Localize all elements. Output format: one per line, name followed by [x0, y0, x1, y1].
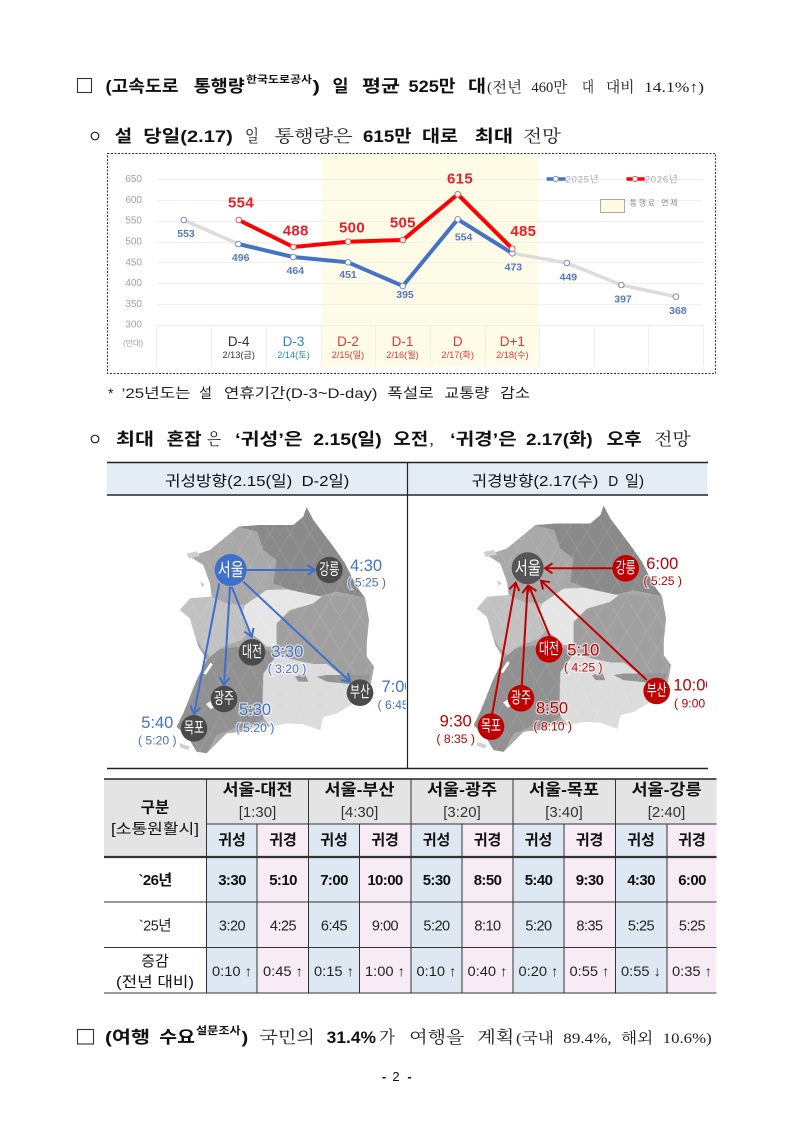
- subheading: peak congestion: 오전: [393, 430, 428, 449]
- row: 2025: [219, 918, 706, 934]
- city labels: outbound: [184, 560, 370, 737]
- travel times: outbound: ( 5:20 ): [236, 721, 274, 735]
- series: 2025 grey extensions: [184, 220, 676, 297]
- subheading: peak congestion: 은: [207, 430, 221, 449]
- heading: return direction: 귀경방향(2.17(수): [472, 473, 598, 490]
- row: 2026: 10:00: [367, 872, 403, 889]
- arrows: outbound: [194, 570, 350, 714]
- row: change vs previous year: 0:20 ↑: [518, 963, 558, 979]
- travel times: outbound: ( 5:20 ): [138, 734, 177, 748]
- day labels: 2/14(토): [277, 350, 310, 360]
- route headers: 서울-광주: [427, 781, 497, 799]
- title: highway traffic headline: 일: [332, 77, 348, 96]
- row: 2026: 6:00: [678, 872, 706, 889]
- direction headers: 귀성: [525, 832, 552, 849]
- title: highway traffic headline: 통행량: [194, 77, 245, 96]
- city labels: outbound: 목포: [184, 720, 204, 737]
- subheading: peak congestion: 혼잡: [167, 430, 202, 449]
- row: change vs previous year: 0:55 ↓: [621, 963, 661, 979]
- page number: 2: [392, 1069, 400, 1084]
- city labels: outbound: 대전: [242, 643, 262, 661]
- travel times: outbound: 3:30: [271, 643, 303, 661]
- city labels: return: 대전: [539, 640, 559, 658]
- direction headers: 귀경: [371, 832, 399, 849]
- subheading: peak congestion: 2.17(화): [526, 430, 593, 449]
- travel times: return: ( 4:25 ): [564, 660, 603, 674]
- travel times: return: ( 8:35 ): [436, 732, 475, 746]
- route headers: [3:40]: [545, 804, 583, 821]
- city nodes: return: [478, 552, 670, 740]
- day labels: 2/13(금): [222, 350, 255, 360]
- closing statement: travel demand: 10.6%): [663, 1031, 712, 1047]
- title: highway traffic headline: 14.1%↑): [644, 80, 704, 96]
- footnote: 연휴기간(D-3~D-day): [224, 385, 378, 401]
- city labels: return: [481, 558, 667, 735]
- title: highway traffic headline: (전년: [487, 78, 522, 96]
- row: 2025: 8:35: [576, 918, 603, 934]
- panel: route map table: [107, 462, 715, 768]
- series: 2025 line: [238, 219, 512, 286]
- travel times: return: ( 5:25 ): [643, 574, 682, 588]
- heading: return direction: D: [608, 473, 618, 490]
- row: 2026: 5:10: [269, 872, 297, 889]
- data labels 2026: 500: [339, 220, 365, 236]
- y axis labels: (만대): [123, 339, 143, 348]
- footnote: ’25년도는: [122, 385, 191, 401]
- data labels 2025: 397: [614, 293, 632, 305]
- data labels 2025: 449: [560, 272, 577, 284]
- direction headers: 귀경: [269, 832, 297, 849]
- city nodes: outbound: [181, 554, 373, 742]
- chart legend: [547, 174, 678, 212]
- city labels: outbound: 부산: [350, 683, 370, 701]
- direction headers: 귀경: [474, 832, 501, 849]
- data labels 2026: 488: [283, 222, 309, 240]
- closing statement: travel demand: 수요: [159, 1028, 195, 1047]
- row: 2025: 5:25: [628, 918, 655, 934]
- footnote: *: [108, 385, 114, 401]
- city labels: return: 강릉: [616, 559, 636, 577]
- closing statement: travel demand: 설문조사: [196, 1024, 241, 1037]
- title: highway traffic headline: 525만: [408, 77, 456, 96]
- closing statement: travel demand: 해외: [621, 1029, 653, 1047]
- city labels: return: 목포: [481, 718, 501, 735]
- row: change vs previous year: 0:40 ↑: [468, 963, 508, 979]
- city labels: return: 광주: [511, 689, 531, 707]
- row: 2026: 8:50: [474, 872, 502, 889]
- subheading: peak congestion: ‘귀성’은: [235, 430, 303, 449]
- subheading: peak congestion: 전망: [654, 429, 691, 449]
- row: 2025: 9:00: [372, 918, 399, 934]
- data labels 2025: 473: [505, 261, 522, 273]
- closing statement: travel demand: 국민의: [259, 1027, 315, 1047]
- day labels: D-3: [283, 334, 304, 349]
- y axis labels: [123, 174, 143, 348]
- direction headers: 귀경: [576, 832, 603, 849]
- day labels: D-1: [392, 334, 413, 349]
- day labels: [222, 334, 529, 360]
- title: highway traffic headline: ): [312, 77, 320, 96]
- footnote: 설: [199, 385, 212, 401]
- subheading: peak day traffic: 일: [245, 127, 259, 146]
- travel times: outbound: 5:40: [141, 714, 173, 732]
- day labels: 2/16(월): [386, 349, 419, 360]
- direction headers: 귀경: [678, 832, 706, 849]
- title: highway traffic headline: 대: [468, 77, 486, 96]
- route headers: 서울-목포: [529, 781, 599, 799]
- closing statement: travel demand: (국내: [516, 1029, 554, 1047]
- data point markers: [181, 192, 679, 300]
- row header labels: `25년: [139, 918, 171, 934]
- data labels 2025: 496: [232, 252, 250, 264]
- day labels: D-2: [337, 334, 359, 349]
- data labels 2025: 464: [287, 265, 304, 277]
- travel times: outbound: 7:00: [382, 678, 414, 696]
- subheading: peak congestion: 2.15(일): [313, 430, 382, 449]
- closing statement: travel demand: 가: [379, 1028, 396, 1047]
- data labels 2026: 505: [390, 214, 416, 232]
- chart legend: 2026년: [645, 174, 678, 186]
- closing statement: travel demand: (여행: [105, 1028, 150, 1047]
- city labels: return: 서울: [515, 558, 541, 578]
- subheading: peak congestion: 오후: [607, 430, 642, 449]
- subheading: peak day traffic: 615만: [363, 127, 412, 146]
- route headers: [222, 781, 702, 821]
- data labels 2025: [177, 228, 687, 317]
- y axis labels: 300: [125, 320, 142, 330]
- direction headers: [218, 832, 706, 849]
- route headers: [1:30]: [239, 804, 276, 821]
- arrows: return: [492, 568, 647, 717]
- travel times: return: [436, 555, 715, 746]
- subheading: peak day traffic: [91, 126, 562, 146]
- city labels: outbound: 강릉: [319, 560, 339, 578]
- row: 2025: 3:20: [219, 918, 246, 934]
- day labels: D-4: [228, 334, 250, 349]
- day labels: D+1: [500, 334, 525, 349]
- row: change vs previous year: 1:00 ↑: [365, 963, 405, 979]
- row header labels: [111, 798, 199, 991]
- title: highway traffic headline: [78, 73, 704, 96]
- closing statement: travel demand: [78, 1024, 712, 1047]
- title: highway traffic headline: 대비: [606, 78, 634, 96]
- table: travel time comparison: [104, 779, 716, 993]
- chart legend: 통행료 면제: [630, 198, 678, 208]
- direction headers: 귀성: [320, 832, 348, 849]
- travel times: outbound: 5:30: [239, 701, 271, 719]
- subheading: peak congestion: 최대: [116, 430, 154, 449]
- row: 2026: 9:30: [576, 872, 604, 889]
- subheading: peak congestion: ,: [430, 430, 434, 449]
- day labels: 2/15(일): [332, 350, 364, 360]
- y axis labels: 350: [125, 299, 142, 310]
- row: change vs previous year: 0:15 ↑: [314, 963, 354, 979]
- data labels 2025: 395: [396, 289, 414, 301]
- travel times: return: 9:30: [440, 713, 472, 731]
- travel times: outbound: ( 6:45 ): [378, 698, 416, 712]
- day labels: D: [453, 334, 463, 349]
- row header labels: (전년 대비): [116, 974, 194, 991]
- city labels: outbound: 서울: [218, 560, 244, 580]
- title: highway traffic headline: 한국도로공사: [246, 73, 312, 86]
- day labels: 2/18(수): [496, 350, 529, 360]
- series: 2026 line: [239, 194, 512, 249]
- closing statement: travel demand: ): [242, 1028, 248, 1047]
- row: 2026: 4:30: [627, 872, 655, 889]
- y axis labels: 650: [125, 174, 142, 185]
- row: 2025: 5:20: [423, 918, 450, 934]
- subheading: peak congestion: ‘귀경’은: [450, 430, 517, 449]
- page number: -: [382, 1069, 386, 1084]
- title: highway traffic headline: 평균: [362, 77, 400, 96]
- row: 2026: 5:30: [423, 872, 451, 889]
- travel times: return: ( 9:00 ): [674, 696, 713, 710]
- heading: return direction: 일): [625, 473, 644, 490]
- day labels: 2/17(화): [441, 350, 474, 360]
- row: 2026: 5:40: [525, 872, 553, 889]
- route headers: [3:20]: [443, 804, 481, 821]
- row: change vs previous year: 0:55 ↑: [570, 963, 610, 979]
- subheading: peak day traffic: 대로: [422, 127, 458, 146]
- travel times: outbound: ( 5:25 ): [347, 576, 386, 590]
- heading: outbound direction: [165, 473, 349, 490]
- closing statement: travel demand: 여행을: [409, 1027, 465, 1047]
- panel: daily traffic line chart: [108, 154, 716, 374]
- subheading: peak day traffic: 통행량은: [275, 127, 353, 146]
- row header labels: `26년: [138, 872, 172, 889]
- travel times: return: 8:50: [536, 699, 568, 717]
- data labels 2025: 368: [669, 305, 687, 317]
- data labels 2025: 451: [339, 269, 357, 281]
- direction headers: 귀성: [627, 832, 655, 849]
- y axis labels: 500: [125, 236, 142, 248]
- closing statement: travel demand: 계획: [477, 1027, 514, 1047]
- route headers: 서울-부산: [324, 781, 395, 799]
- direction headers: 귀성: [423, 832, 450, 849]
- travel times: outbound: ( 3:20 ): [268, 662, 306, 676]
- row: 2025: 8:10: [474, 918, 501, 934]
- footnote: 폭설로: [387, 385, 434, 401]
- row: 2025: 5:20: [525, 918, 552, 934]
- footnote: 감소: [500, 385, 530, 401]
- travel times: return: 5:10: [567, 642, 599, 660]
- row: 2025: 6:45: [321, 918, 348, 934]
- y axis labels: 450: [125, 258, 142, 268]
- row: 2026: [218, 872, 706, 889]
- heading: return direction: [472, 473, 644, 490]
- y axis labels: 400: [125, 278, 142, 289]
- row: 2026: 3:30: [218, 872, 246, 889]
- row header labels: 증감: [141, 953, 169, 970]
- footnote: [108, 385, 530, 401]
- y axis labels: 550: [125, 216, 142, 226]
- route headers: 서울-강릉: [632, 781, 702, 799]
- data labels 2026: 615: [447, 170, 473, 188]
- route headers: 서울-대전: [222, 781, 292, 799]
- city labels: return: 부산: [647, 682, 667, 700]
- data labels 2026: [228, 170, 536, 240]
- subheading: peak day traffic: 전망: [523, 126, 562, 146]
- map: outbound routes from Seoul: [138, 507, 416, 753]
- heading: outbound direction: 귀성방향(2.15(일): [165, 473, 292, 490]
- row: change vs previous year: 0:10 ↑: [416, 963, 456, 979]
- row header labels: 구분: [141, 798, 169, 816]
- city labels: outbound: 광주: [214, 690, 234, 708]
- footnote: 교통량: [444, 385, 489, 401]
- heading: outbound direction: D-2일): [302, 473, 349, 490]
- travel times: return: 6:00: [646, 555, 678, 573]
- travel times: outbound: [138, 557, 416, 748]
- row header labels: [소통원활시]: [111, 821, 199, 838]
- row: change vs previous year: 0:10 ↑: [212, 963, 252, 979]
- cell fills: [104, 779, 716, 993]
- page number: [382, 1069, 412, 1084]
- row: 2026: 7:00: [320, 872, 348, 889]
- map: return routes to Seoul: [436, 506, 715, 752]
- title: highway traffic headline: 대: [582, 78, 594, 96]
- row: change vs previous year: 0:45 ↑: [263, 963, 303, 979]
- closing statement: travel demand: 89.4%,: [563, 1031, 612, 1047]
- data labels 2025: 553: [177, 228, 195, 240]
- row: change vs previous year: 0:35 ↑: [672, 963, 712, 979]
- direction headers: 귀성: [218, 832, 246, 849]
- subheading: peak congestion: [91, 429, 691, 449]
- chart legend: 2025년: [566, 174, 599, 186]
- data labels 2025: 554: [455, 231, 473, 243]
- travel times: outbound: 4:30: [350, 557, 382, 575]
- row: 2025: 5:25: [679, 918, 706, 934]
- row: change vs previous year: [212, 963, 712, 979]
- subheading: peak day traffic: 당일(2.17): [143, 127, 233, 146]
- travel times: return: 10:00: [673, 677, 715, 695]
- row: 2025: 4:25: [270, 918, 297, 934]
- route headers: [2:40]: [648, 804, 685, 821]
- subheading: peak day traffic: 최대: [475, 127, 513, 146]
- y axis labels: 600: [125, 195, 142, 206]
- data labels 2026: 485: [510, 223, 536, 240]
- route headers: [4:30]: [341, 804, 378, 821]
- title: highway traffic headline: (고속도로: [106, 77, 178, 96]
- title: highway traffic headline: 460만: [531, 78, 568, 96]
- page number: -: [407, 1069, 412, 1084]
- travel times: return: ( 8:10 ): [533, 720, 572, 734]
- data labels 2026: 554: [228, 194, 254, 212]
- subheading: peak day traffic: 설: [115, 127, 132, 146]
- closing statement: travel demand: 31.4%: [327, 1028, 376, 1047]
